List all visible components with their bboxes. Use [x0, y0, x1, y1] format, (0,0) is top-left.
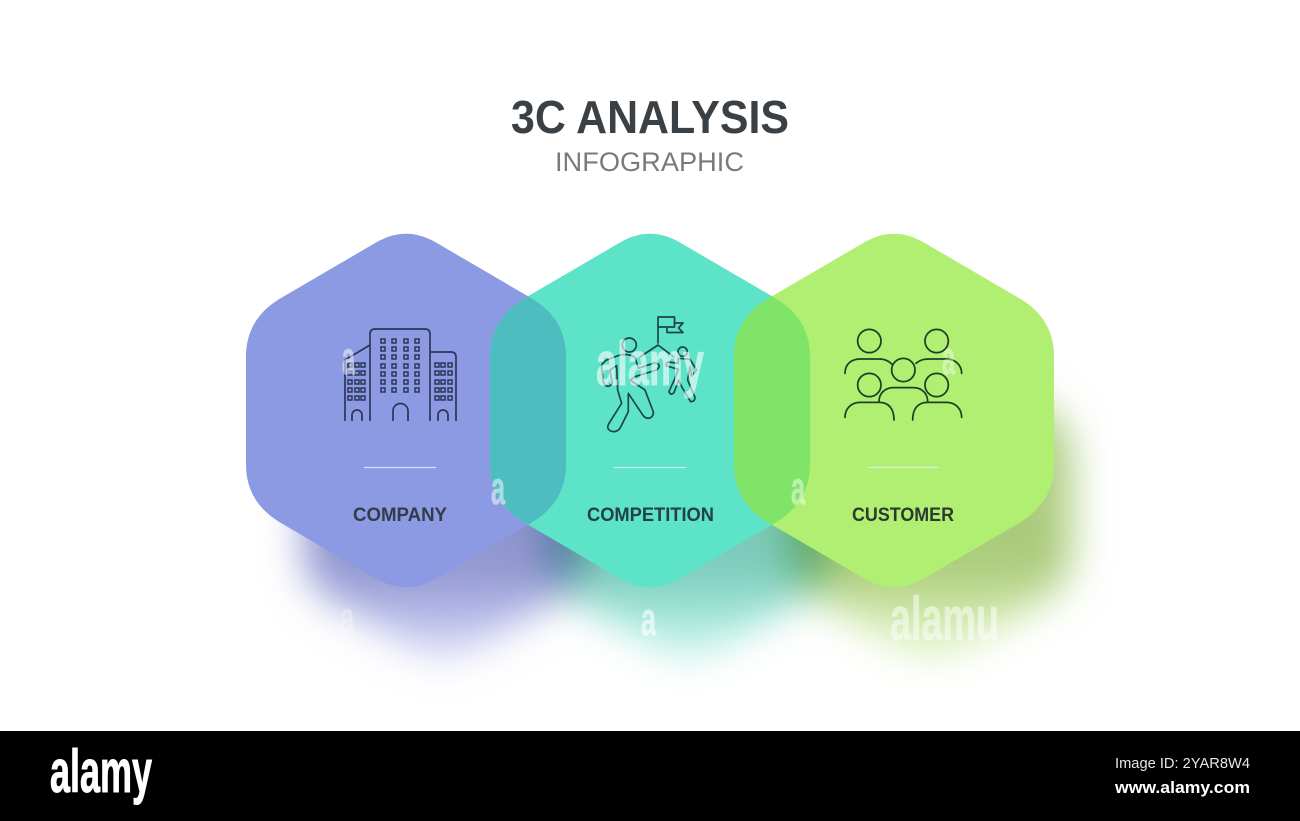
panel: company hexagon — [246, 234, 566, 587]
title: INFOGRAPHIC — [555, 147, 744, 177]
watermark marks: a — [340, 592, 354, 644]
watermark marks: a — [641, 593, 656, 645]
watermark marks: a — [942, 332, 955, 384]
watermark marks: a — [491, 462, 505, 514]
watermark marks: alamy — [596, 330, 704, 399]
title — [511, 91, 789, 177]
watermark marks: a — [791, 462, 805, 514]
overlap: company and competition — [490, 296, 566, 525]
overlap: competition and customer — [734, 296, 810, 525]
watermark marks: alamu — [890, 585, 999, 654]
soft drop shadows under hexagons — [304, 351, 1071, 659]
label: company: COMPANY — [353, 505, 447, 526]
icon: group of people — [845, 329, 962, 420]
footer url: www.alamy.com — [1114, 778, 1250, 797]
title: 3C ANALYSIS — [511, 91, 789, 143]
watermark marks: a — [342, 332, 355, 384]
icon: runners with flag — [602, 317, 697, 432]
footer image id: Image ID: 2YAR8W4 — [1115, 755, 1250, 772]
panel: customer hexagon — [734, 234, 1054, 588]
label: competition: COMPETITION — [587, 505, 714, 526]
divider lines — [364, 466, 939, 468]
icon: office buildings — [345, 329, 456, 421]
watermark marks — [340, 330, 999, 654]
panel: competition hexagon — [490, 234, 772, 588]
footer bar — [0, 731, 1300, 821]
label: customer: CUSTOMER — [852, 505, 954, 526]
footer logo: alamy — [50, 738, 152, 805]
